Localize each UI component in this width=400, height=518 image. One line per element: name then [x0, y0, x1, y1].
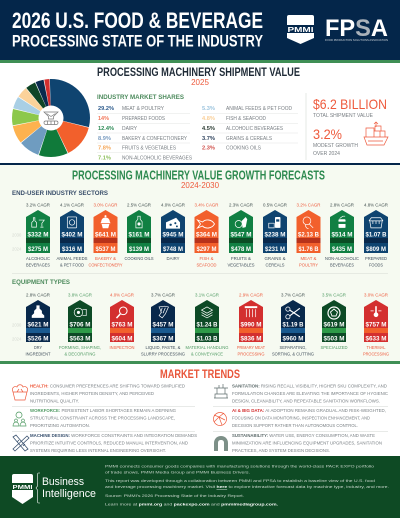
market shares table: 7.1% — [98, 156, 112, 162]
sector: meat and poultry — [296, 202, 320, 268]
market shares table: 4.5% — [202, 126, 216, 132]
icon: scissors — [286, 307, 300, 319]
equipment: material handling: $1.03 B — [196, 336, 218, 342]
axis labels: equipment: 2030 — [12, 322, 22, 328]
icon: ingredient hopper — [32, 305, 44, 318]
icon: cupcake — [100, 215, 111, 228]
icon: fish — [198, 220, 214, 228]
trend: workforce: STRUCTURAL CONSTRAINT ACROSS THE PROCESSING LANDSCAPE, — [30, 416, 175, 420]
footer text: and beverage processing machinery market. Visit here to explore interactive forecast data by machine type, industry, and more. — [105, 484, 389, 489]
sector: cooking oils: $139 M — [129, 246, 149, 253]
sector: non-alcoholic beverages: $514 M — [332, 232, 353, 238]
sector: alcoholic beverages: 3.2% CAGR — [26, 202, 50, 208]
equipment: dry ingredient: DRY — [34, 345, 42, 350]
equipment: material handling: 3.1% CAGR — [195, 292, 219, 298]
sector: alcoholic beverages — [26, 202, 50, 268]
stat: total shipment value — [313, 96, 387, 119]
sector: animal feeds — [56, 202, 88, 268]
trend: machine design: PRIORITIZE INTUITIVE CONTROLS, REDUCED MANUAL INTERVENTION, AND — [30, 440, 189, 446]
footer text: Source: PMMI's 2026 Processing State of the Industry Report. — [105, 493, 244, 498]
equipment: primary meat processing: PROCESSING — [238, 352, 265, 356]
trend: health: NUTRITIONAL QUALITY. — [30, 398, 79, 404]
stat: modest growth — [313, 126, 358, 157]
sector: non-alcoholic beverages — [325, 202, 359, 268]
sector: prepared foods: 4.8% CAGR — [364, 202, 388, 208]
trend: AI and big data — [214, 408, 386, 428]
footer text: of trade shows, PMMI Media Group and PMMI Business Drivers. — [105, 470, 250, 474]
equipment: primary meat processing: $990 M — [240, 322, 262, 328]
sector: cooking oils: 2.5% CAGR — [127, 202, 151, 208]
subheading: 2024-2030: 2024-2030 — [181, 181, 220, 190]
donut chart — [26, 92, 76, 144]
equipment: primary meat processing: $836 M — [240, 336, 262, 342]
sector: meat and poultry: $1.76 B — [298, 246, 319, 253]
footer text: PMMI connects consumer goods companies with manufacturing solutions through the world-class PACK EXPO portfolio — [105, 464, 375, 468]
sector: grains and cereals — [263, 202, 287, 268]
panel: growth forecasts — [12, 168, 390, 356]
sector: dairy: 4.0% CAGR — [161, 202, 185, 208]
sector: grains and cereals: $238 M — [264, 232, 286, 238]
equipment: specialized: SPECIALIZED — [320, 345, 348, 350]
logo: PMMI: PMMI — [288, 27, 314, 34]
equipment: specialized: 3.5% CAGR — [322, 292, 346, 298]
sector: bakery — [88, 202, 123, 268]
equipment: inspection: INSPECTION — [110, 345, 134, 350]
sector: fish and seafood: $364 M — [196, 232, 217, 238]
trend: sustainability: SUSTAINABILITY: WATER USE, ENERGY CONSUMPTION, AND WASTE — [232, 433, 375, 438]
stat: modest growth: OVER 2024 — [313, 151, 340, 157]
stat: total shipment value: $6.2 BILLION — [313, 96, 387, 112]
sector: bakery: BAKERY & — [95, 256, 116, 261]
panel: shipment value 2025 — [26, 65, 388, 162]
sector: fruits and vegetables: FRUITS & — [231, 256, 251, 261]
equipment: thermal processing: 3.0% CAGR — [364, 292, 388, 298]
market shares table: 4.8% — [202, 116, 216, 122]
axis labels: equipment — [12, 322, 22, 342]
trend: health: INGREDIENTS, HIGHER PROTEIN DENSITY, AND PERCEIVED — [30, 391, 155, 396]
footer text: This report was developed through a collaboration between PMMI and FPSA to establish a baseline view of the U.S. food — [105, 478, 375, 483]
trend: health: HEALTH: CONSUMER PREFERENCES ARE SHIFTING TOWARD SIMPLIFIED — [30, 384, 186, 388]
equipment: specialized: $503 M — [324, 336, 345, 342]
icon: crossed tools — [13, 435, 29, 451]
trend: workforce — [13, 408, 176, 428]
sector: fish and seafood: SEAFOOD — [196, 262, 216, 268]
sector: bakery: $641 M — [95, 232, 116, 238]
trend: sanitation: DESIGN, CLEANABILITY, AND REPEATABLE SANITATION WORKFLOWS. — [232, 398, 380, 404]
equipment: primary meat processing: 2.9% CAGR — [239, 292, 263, 298]
sector: grains and cereals: $231 M — [265, 246, 285, 253]
sector: fish and seafood: $297 M — [196, 246, 217, 253]
sector: alcoholic beverages: $332 M — [28, 232, 49, 238]
equipment: dry ingredient — [26, 292, 51, 356]
heading: market shares: INDUSTRY MARKET SHARES — [97, 94, 184, 101]
equipment: material handling: & CONVEYANCE — [191, 352, 223, 356]
market shares table: MEAT & POULTRY — [122, 106, 165, 112]
trend: sanitation: FORMULATION CHANGES ARE ELEVATING THE IMPORTANCE OF HYGIENIC — [232, 391, 389, 396]
market shares table: 29.2% — [98, 106, 115, 112]
footer text — [105, 464, 389, 506]
sector: animal feeds: 4.1% CAGR — [60, 202, 84, 208]
sector: fruits and vegetables: VEGETABLES — [228, 262, 255, 268]
market shares table: ALCOHOLIC BEVERAGES — [226, 126, 284, 132]
sector: alcoholic beverages: BEVERAGES — [26, 262, 50, 268]
equipment: dry ingredient: $621 M — [28, 322, 49, 328]
sector: bakery: CONFECTIONERY — [88, 262, 123, 268]
sector: meat and poultry: MEAT & — [300, 256, 317, 261]
icon: stacked layers — [202, 307, 212, 318]
heading: equipment types: EQUIPMENT TYPES — [12, 279, 70, 286]
icon: oil bottle — [136, 216, 142, 228]
market shares table: 2.3% — [202, 146, 216, 152]
logo: PMMI business intelligence: Intelligence — [42, 488, 96, 500]
sector: meat and poultry: 3.2% CAGR — [297, 202, 320, 208]
sector: fruits and vegetables — [228, 202, 255, 268]
sector: prepared foods: FOODS — [369, 262, 383, 268]
market shares table: 3.7% — [202, 136, 216, 142]
sector: prepared foods — [364, 202, 388, 268]
equipment: forming, shaping and decorating: $706 M — [70, 322, 91, 328]
equipment: separating, sorting and cutting: 3.7% CAGR — [281, 292, 305, 298]
trend: machine design: MACHINE DESIGN: WORKFORCE CONSTRAINTS AND INTEGRATION DEMANDS — [30, 433, 197, 438]
sector: bakery: $537 M — [96, 246, 116, 253]
sector: cooking oils: $161 M — [128, 232, 150, 238]
icon: cargo ship — [364, 122, 388, 145]
logo: PMMI business intelligence: PMMI — [12, 485, 33, 491]
equipment: specialized — [320, 292, 348, 350]
logo: PMMI — [287, 15, 314, 44]
equipment: forming, shaping and decorating: & DECORATING — [64, 352, 96, 356]
trend: sustainability: MINIMIZATION ARE INFLUENCING EQUIPMENT UPGRADES, SANITATION — [232, 440, 382, 446]
equipment: dry ingredient: INGREDIENT — [26, 352, 51, 356]
stat: modest growth: MODEST GROWTH — [313, 143, 358, 149]
logo: PMMI business intelligence — [12, 473, 96, 504]
axis labels: sectors: 2024 — [12, 246, 22, 252]
market shares table: NON-ALCOHOLIC BEVERAGES — [122, 156, 193, 162]
sector: dairy — [161, 202, 185, 261]
icon: magnifying glass — [116, 307, 127, 318]
sector: grains and cereals: GRAINS & — [264, 256, 286, 261]
sector: meat and poultry: $2.13 B — [298, 232, 319, 238]
panel: market trends — [12, 369, 389, 453]
sector: fruits and vegetables: 2.3% CAGR — [229, 202, 253, 208]
icon: meat rack — [245, 306, 257, 317]
equipment: dry ingredient: $526 M — [28, 336, 49, 342]
logo: PMMI business intelligence: Business — [42, 476, 84, 488]
market shares table: 5.3% — [202, 106, 216, 112]
equipment: primary meat processing — [237, 292, 265, 356]
sector: non-alcoholic beverages: NON-ALCOHOLIC — [325, 256, 359, 261]
icon: drink cup — [338, 216, 346, 228]
sector: dairy: DAIRY — [166, 256, 180, 261]
market shares table: 14% — [98, 116, 110, 122]
sector: cooking oils — [124, 202, 154, 261]
sector: dairy: $748 M — [163, 246, 183, 253]
equipment: liquid, paste and slurry: $367 M — [152, 336, 174, 342]
sector: animal feeds: & PET FOOD — [60, 262, 84, 268]
icon: workforce gear and people — [13, 412, 26, 426]
icon: AI network — [214, 412, 226, 426]
trend: machine design: SYSTEMS REQUIRING LESS INTERNAL ENGINEERING OVERSIGHT. — [30, 448, 166, 453]
trend: health — [12, 384, 186, 404]
icon: specialized gear — [328, 307, 340, 319]
sector: animal feeds: $316 M — [62, 246, 82, 253]
equipment: liquid, paste and slurry — [141, 292, 186, 356]
trend: workforce: PRIORITIZING AUTOMATION. — [30, 423, 90, 428]
equipment: thermal processing: PROCESSING — [363, 352, 390, 356]
trend: AI and big data: AI & BIG DATA: AI ADOPTION REMAINS GRADUAL AND RISK-WEIGHTED, — [232, 408, 386, 413]
equipment: inspection: 4.0% CAGR — [110, 292, 134, 298]
sector: fruits and vegetables: $478 M — [231, 246, 251, 253]
icon: machine — [44, 112, 58, 124]
equipment: forming, shaping and decorating: 3.8% CAGR — [68, 292, 92, 298]
equipment: thermal processing — [363, 292, 390, 356]
sector: prepared foods: PREPARED — [365, 256, 387, 261]
equipment: liquid, paste and slurry: $457 M — [152, 322, 174, 328]
equipment: forming, shaping and decorating: $563 M — [70, 336, 91, 342]
icon: salad bowl — [12, 385, 28, 400]
equipment: primary meat processing: PRIMARY MEAT — [237, 345, 265, 350]
market shares table — [97, 94, 298, 162]
icon: cheese — [166, 218, 180, 229]
sector: grains and cereals: 0.5% CAGR — [263, 202, 287, 208]
sector: meat and poultry: POULTRY — [299, 262, 318, 268]
equipment: specialized: $619 M — [324, 322, 345, 328]
heading: end-user sectors: END-USER INDUSTRY SECTORS — [12, 190, 108, 197]
title: PROCESSING STATE OF THE INDUSTRY — [12, 32, 263, 50]
footer — [0, 456, 400, 518]
equipment: inspection: $604 M — [112, 336, 133, 342]
trend: machine design — [13, 433, 197, 453]
equipment: thermal processing: $757 M — [366, 322, 387, 328]
sector: animal feeds: ANIMAL FEEDS — [56, 256, 88, 261]
market shares table: GRAINS & CEREALS — [226, 136, 273, 142]
axis labels: sectors: 2030 — [12, 232, 22, 238]
equipment: separating, sorting and cutting: SEPARATING, — [280, 345, 306, 350]
trend: AI and big data: FOCUSING ON DATA MONITORING, INSPECTION ENHANCEMENT, AND — [232, 416, 371, 420]
title — [12, 8, 263, 50]
sector: fish and seafood: 3.4% CAGR — [195, 202, 218, 208]
sector: bakery: 3.0% CAGR — [94, 202, 117, 208]
axis labels: sectors — [12, 232, 22, 252]
icon: produce — [235, 217, 247, 228]
market shares table: 8.9% — [98, 136, 112, 142]
trend: workforce: WORKFORCE: PERSISTENT LABOR SHORTAGES REMAIN A DEFINING — [30, 408, 176, 413]
title: 2026 U.S. FOOD & BEVERAGE — [12, 8, 263, 33]
market shares table: 12.4% — [98, 126, 115, 132]
market shares table: BAKERY & CONFECTIONERY — [122, 136, 188, 142]
equipment: liquid, paste and slurry: LIQUID, PASTE, & — [146, 345, 181, 350]
icon: meal tray — [369, 218, 383, 228]
icon: forming roller — [74, 308, 86, 317]
market shares table: 7.8% — [98, 146, 112, 152]
market shares table: PREPARED FOODS — [122, 116, 166, 122]
equipment: forming, shaping and decorating — [59, 292, 101, 356]
equipment: liquid, paste and slurry: 3.7% CAGR — [151, 292, 175, 298]
equipment: material handling: $1.24 B — [196, 322, 218, 328]
stat: total shipment value: TOTAL SHIPMENT VALUE — [313, 113, 374, 119]
equipment: inspection: $763 M — [112, 322, 133, 328]
sector: alcoholic beverages: ALCOHOLIC — [26, 256, 50, 261]
sector: animal feeds: $402 M — [62, 232, 83, 238]
logo: FPSA: FOOD PRODUCTION SOLUTIONS ASSOCIATION — [325, 38, 388, 42]
market shares table: FISH & SEAFOOD — [226, 116, 266, 122]
icon: sanitation — [214, 384, 228, 398]
icon: drumstick — [303, 217, 313, 229]
icon: pipe — [159, 306, 168, 318]
trend: sanitation — [214, 384, 389, 404]
icon: thermometer — [371, 306, 381, 317]
header band — [0, 0, 400, 63]
equipment: inspection — [110, 292, 134, 350]
equipment: dry ingredient: 2.8% CAGR — [26, 292, 50, 298]
sector: cooking oils: COOKING OILS — [124, 256, 154, 261]
sector: fruits and vegetables: $547 M — [230, 232, 252, 238]
market shares table: DAIRY — [122, 126, 138, 132]
sector: dairy: $945 M — [162, 232, 184, 238]
equipment: separating, sorting and cutting: $960 M — [282, 336, 304, 342]
equipment: thermal processing: $633 M — [366, 336, 387, 342]
icon: bottle and glass — [32, 218, 44, 227]
icon: feed bag — [67, 217, 77, 228]
trend: sustainability: PRACTICES, AND SYSTEM DESIGN DECISIONS. — [232, 448, 330, 453]
footer text: Learn more at pmmi.org and packexpo.com and pmmimediagroup.com. — [105, 502, 278, 506]
icon: cereal box and bowl — [269, 217, 280, 228]
equipment: material handling — [186, 292, 229, 356]
equipment: separating, sorting and cutting: $1.19 B — [282, 322, 304, 328]
heading: market trends: MARKET TRENDS — [160, 369, 240, 381]
equipment: separating, sorting and cutting — [272, 292, 315, 356]
trend: AI and big data: DECISION SUPPORT RATHER THAN AUTONOMOUS CONTROL. — [232, 423, 358, 428]
sector: fish and seafood: FISH & — [200, 256, 214, 261]
trend: sanitation: SANITATION: RISING RECALL VISIBILITY, HIGHER SKU COMPLEXITY, AND — [232, 384, 388, 388]
sector: alcoholic beverages: $275 M — [28, 246, 48, 253]
sector: non-alcoholic beverages: BEVERAGES — [330, 262, 354, 268]
sector: non-alcoholic beverages: 2.8% CAGR — [330, 202, 354, 208]
market shares table: ANIMAL FEEDS & PET FOOD — [226, 106, 292, 112]
equipment: liquid, paste and slurry: SLURRY PROCESSING — [141, 352, 186, 356]
equipment: thermal processing: THERMAL — [366, 345, 386, 350]
sector: non-alcoholic beverages: $435 M — [332, 246, 352, 253]
heading: shipment value: PROCESSING MACHINERY SHIPMENT VALUE — [97, 65, 300, 79]
axis labels: equipment: 2024 — [12, 336, 22, 342]
equipment: material handling: MATERIAL HANDLING — [186, 345, 229, 350]
sector: fish and seafood — [194, 202, 218, 268]
trend: sustainability — [214, 433, 382, 453]
icon: sustainability — [214, 436, 228, 451]
subheading: 2025: 2025 — [191, 78, 209, 87]
equipment: forming, shaping and decorating: FORMING, SHAPING, — [59, 345, 101, 350]
sector: prepared foods: $809 M — [366, 246, 386, 253]
market shares table: FRUITS & VEGETABLES — [122, 146, 177, 152]
sector: prepared foods: $1.07 B — [366, 232, 387, 238]
stat: modest growth: 3.2% — [313, 126, 342, 142]
sector: grains and cereals: CEREALS — [266, 262, 285, 268]
logo: FPSA: FPSA — [325, 15, 388, 42]
market shares table: COOKING OILS — [226, 146, 262, 152]
equipment: separating, sorting and cutting: SORTING, & CUTTING — [272, 352, 315, 356]
